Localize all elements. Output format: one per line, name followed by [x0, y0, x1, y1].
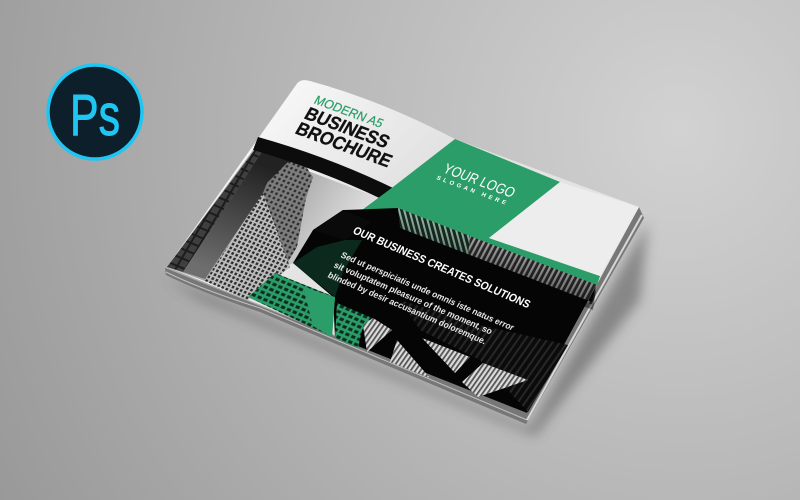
faint stripes in black panel — [400, 300, 568, 412]
tagline: OUR BUSINESS CREATES SOLUTIONS — [350, 225, 533, 311]
small black tab — [313, 210, 372, 240]
icon: Photoshop badge — [48, 65, 142, 159]
white header panel — [167, 80, 639, 413]
logo text: YOUR LOGO — [440, 162, 518, 201]
dark green overlay — [293, 240, 362, 297]
logo text: SLOGAN HERE — [435, 176, 507, 206]
body copy: Sed ut perspiciatis unde omnis iste natus error — [339, 250, 516, 333]
body copy: sit voluptatem pleasure of the moment, so — [332, 260, 495, 336]
building lit facade — [205, 193, 290, 300]
body copy: blinded by desir accusantium doloremque. — [326, 270, 488, 346]
title: MODERN A5 — [311, 93, 386, 130]
icon: Photoshop badge: Ps — [70, 83, 120, 148]
band fade — [397, 208, 597, 310]
building concrete side — [183, 150, 292, 279]
title: BROCHURE — [291, 119, 396, 172]
photo base: sky — [167, 150, 397, 297]
green photo section — [248, 273, 335, 337]
black lower panel — [293, 208, 596, 413]
green solid corner — [303, 287, 335, 337]
brochure cover — [167, 80, 639, 413]
title — [291, 93, 396, 172]
black diagonal band — [253, 137, 413, 207]
title: BUSINESS — [300, 104, 393, 153]
lower green grid — [335, 303, 372, 348]
building tower — [263, 160, 313, 270]
grey stripe shards — [363, 318, 528, 397]
brochure shadow — [165, 222, 648, 436]
striped building band, green side — [397, 208, 470, 258]
white right block — [489, 182, 639, 276]
page stack edge — [165, 207, 644, 424]
building dark strip — [167, 148, 263, 272]
striped building band, grey side — [468, 236, 597, 305]
green panel — [362, 139, 600, 285]
